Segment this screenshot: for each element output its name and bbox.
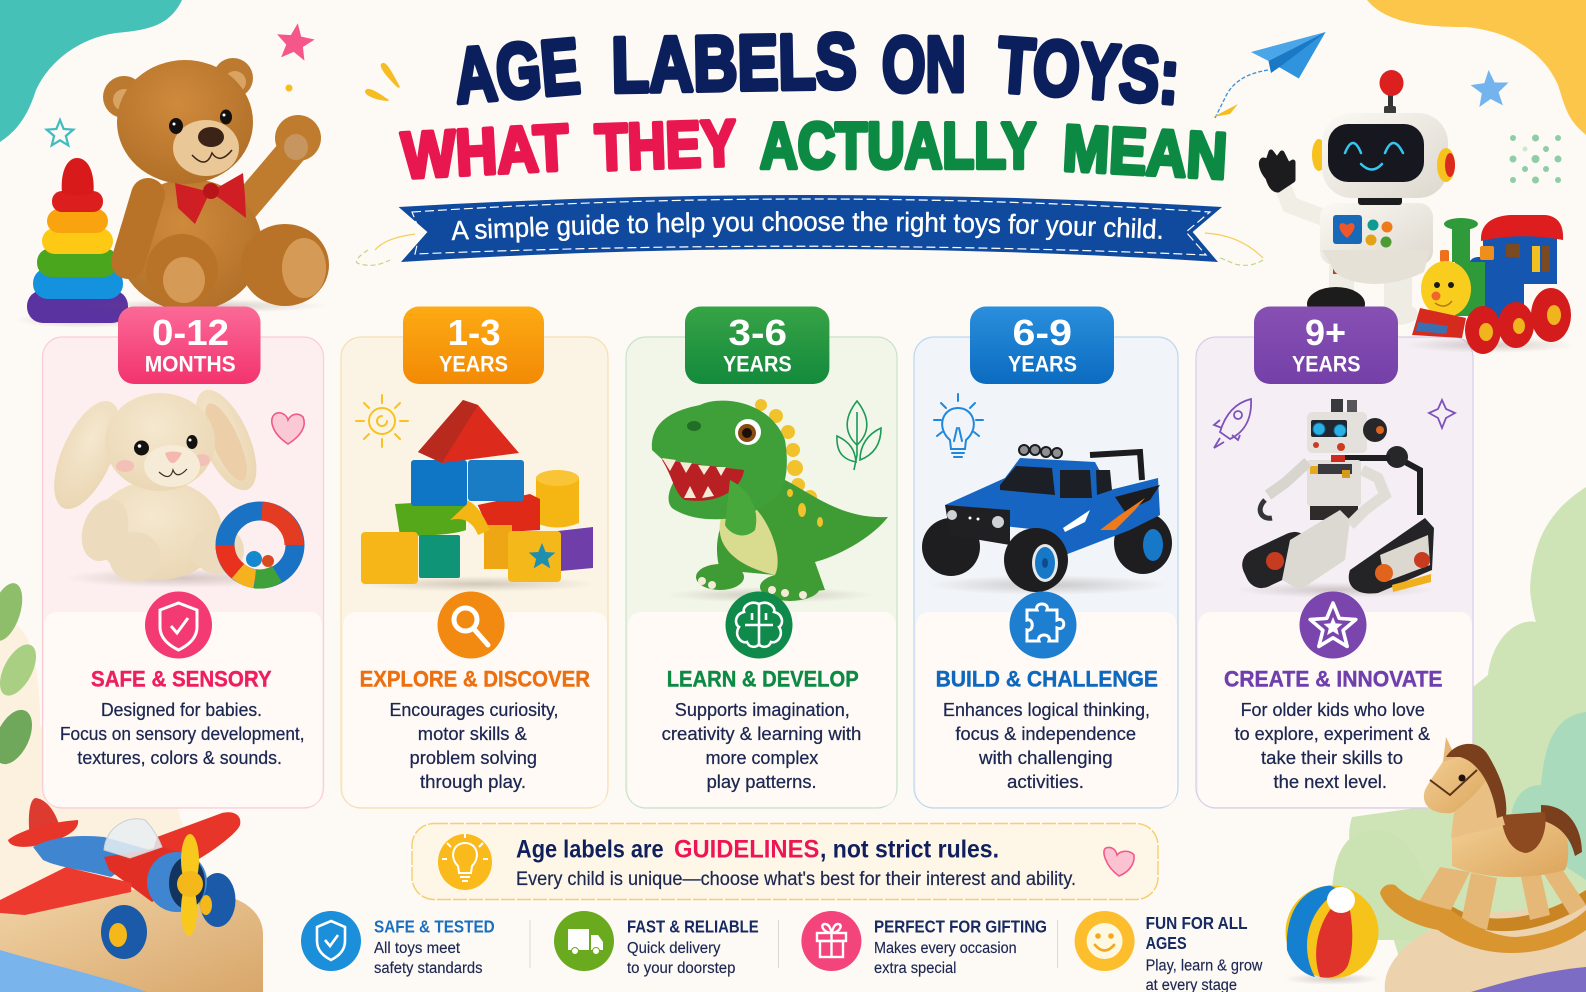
feature: fast and reliable: FAST & RELIABLE [627,916,759,936]
description: through play. [420,772,526,792]
rocking horse [1380,737,1586,953]
panel: 9+ years [1196,306,1473,808]
arm right [1350,470,1385,525]
lower panel [1198,612,1472,807]
age badge: YEARS [1292,352,1360,377]
corner blob: teal [0,0,182,142]
age badge: YEARS [723,352,792,377]
title line 1: LABELS [611,17,857,109]
title line 1: TOYS: [995,20,1183,121]
dinosaur [652,399,888,603]
lower panel [916,612,1177,807]
tracks [1237,527,1319,593]
icon: shield [145,592,212,658]
roof bars [1090,452,1142,480]
torso [1307,460,1361,506]
description: Encourages curiosity, [390,700,558,720]
icon: magnifier [438,592,504,658]
callout subtext: Every child is unique—choose what's best for their interest and ability. [516,869,1076,890]
feature: fast and reliable [554,911,759,977]
feature: safe and tested: safety standards [374,960,483,977]
callout headline [516,836,999,864]
sparkle doodle [1429,400,1455,428]
title line 2: ACTUALLY [760,109,1036,182]
heart doodle [272,413,304,444]
feature: safe and tested [301,911,495,977]
icon: star [1300,592,1366,658]
feature: perfect for gifting: PERFECT FOR GIFTING [874,916,1047,936]
feature: fun for all ages: FUN FOR ALL [1146,913,1248,933]
head [1312,139,1326,171]
lower panel [44,612,322,807]
age badge: MONTHS [145,352,236,377]
description [943,700,1150,792]
teddy bear [80,58,330,313]
beach ball [1284,886,1380,985]
feature: fun for all ages: AGES [1146,933,1187,953]
age badge [1254,306,1398,384]
leaf doodle [837,401,881,470]
callout headline: Age labels are [516,836,664,864]
age badge: 0-12 [152,312,229,353]
background blob: peach left [0,620,263,992]
legs [1414,866,1586,930]
description: play patterns. [707,772,817,792]
heading: SAFE & SENSORY [91,666,272,692]
lower panel [628,612,896,807]
paper plane [1213,32,1326,118]
bow tie [175,173,246,224]
description: activities. [1007,772,1084,792]
description: take their skills to [1261,748,1403,768]
title line 2: WHAT [400,110,571,192]
arm [1281,182,1325,218]
spikes [755,399,851,525]
neck and head [1451,770,1505,838]
feature: perfect for gifting [801,911,1047,977]
panel: 1-3 years [341,306,608,808]
title line 1: ON [882,20,966,108]
title [400,17,1229,193]
right leg [1384,277,1412,317]
age badge: YEARS [439,352,508,377]
age badge [970,306,1114,384]
callout headline: GUIDELINES [674,836,819,864]
ribbon trails [356,233,1263,265]
background hills: right [1330,487,1586,960]
description: Focus on sensory development, [60,724,304,744]
wooden table: left [0,889,263,992]
feature: perfect for gifting: extra special [874,960,956,977]
description: more complex [706,748,818,768]
title line 2: MEAN [1061,111,1229,193]
icon: bulb [438,833,492,890]
far rocker [1450,890,1586,931]
description: creativity & learning with [662,724,861,744]
building blocks [358,400,598,592]
decor: teal star [47,120,73,145]
rocket doodle [1214,399,1251,448]
callout: guidelines [412,824,1158,900]
description: Enhances logical thinking, [943,700,1150,720]
feature: perfect for gifting: Makes every occasion [874,940,1017,957]
robot toy [1261,70,1455,325]
body [1320,203,1433,265]
feature: safe and tested: All toys meet [374,940,461,957]
feature: fast and reliable: to your doorstep [627,960,736,977]
feature: safe and tested: SAFE & TESTED [374,916,495,936]
lego robot [1235,399,1435,598]
toy plane [0,798,240,959]
age badge: 3-6 [728,312,787,353]
heading: CREATE & INNOVATE [1224,666,1442,692]
panel: 3-6 years [626,306,897,808]
description: with challenging [978,748,1113,768]
panel: 0-12 months [41,306,323,808]
bunny [41,381,295,588]
plane wheels [101,873,236,959]
description: focus & independence [955,724,1136,744]
rattle ring [225,511,295,579]
title line 2: THEY [594,106,737,184]
subtitle text: A simple guide to help you choose the right toys for your child. [452,211,1162,243]
age badge [685,306,829,384]
feature: fun for all ages [1075,911,1263,992]
description [662,700,861,792]
heading: LEARN & DEVELOP [667,666,859,692]
title line 2 [400,106,1229,193]
decor: blue star [1470,69,1510,107]
corner blob: yellow [1367,0,1586,135]
decor: yellow sparks [286,63,400,101]
icon: brain [726,592,792,658]
description: Designed for babies. [101,700,262,720]
age badge: YEARS [1008,352,1077,377]
left leg [1329,265,1354,295]
description [60,700,304,768]
decor: green dots [1510,134,1562,184]
icon: puzzle [1010,592,1076,658]
arm left [1268,462,1308,495]
description [390,700,558,792]
description: to explore, experiment & [1235,724,1430,744]
heading: EXPLORE & DISCOVER [360,666,590,692]
sun doodle [356,395,408,447]
ring stacker toy [15,158,155,328]
near rocker [1380,884,1586,953]
panel: 6-9 years [914,306,1178,808]
leaves: left [0,579,44,770]
heading: BUILD & CHALLENGE [936,666,1158,692]
title line 1: AGE [451,21,583,120]
age badge [403,306,544,384]
callout headline: , not strict rules. [820,836,999,864]
toy truck [922,445,1172,595]
toy train [1405,215,1575,354]
description: the next level. [1274,772,1387,792]
icon: heart [1104,847,1134,876]
bulb doodle [934,394,983,457]
description: Supports imagination, [675,700,850,720]
age badge: 6-9 [1012,312,1072,353]
age badge: 1-3 [448,312,501,353]
feature: fun for all ages: Play, learn & grow [1146,958,1263,975]
decor: pink star [274,21,317,62]
feature: fast and reliable: Quick delivery [627,940,721,957]
age badge: 9+ [1305,312,1346,353]
head [1307,412,1367,453]
body [1452,819,1568,877]
lower panel [343,612,607,807]
description: For older kids who love [1241,700,1425,720]
ribbon: subtitle [398,195,1222,262]
description [1235,700,1430,792]
description: motor skills & [418,724,527,744]
age badge [118,306,260,384]
description: textures, colors & sounds. [77,748,282,768]
title line 1 [451,17,1183,121]
description: problem solving [410,748,537,768]
wooden table: right [1385,905,1586,992]
